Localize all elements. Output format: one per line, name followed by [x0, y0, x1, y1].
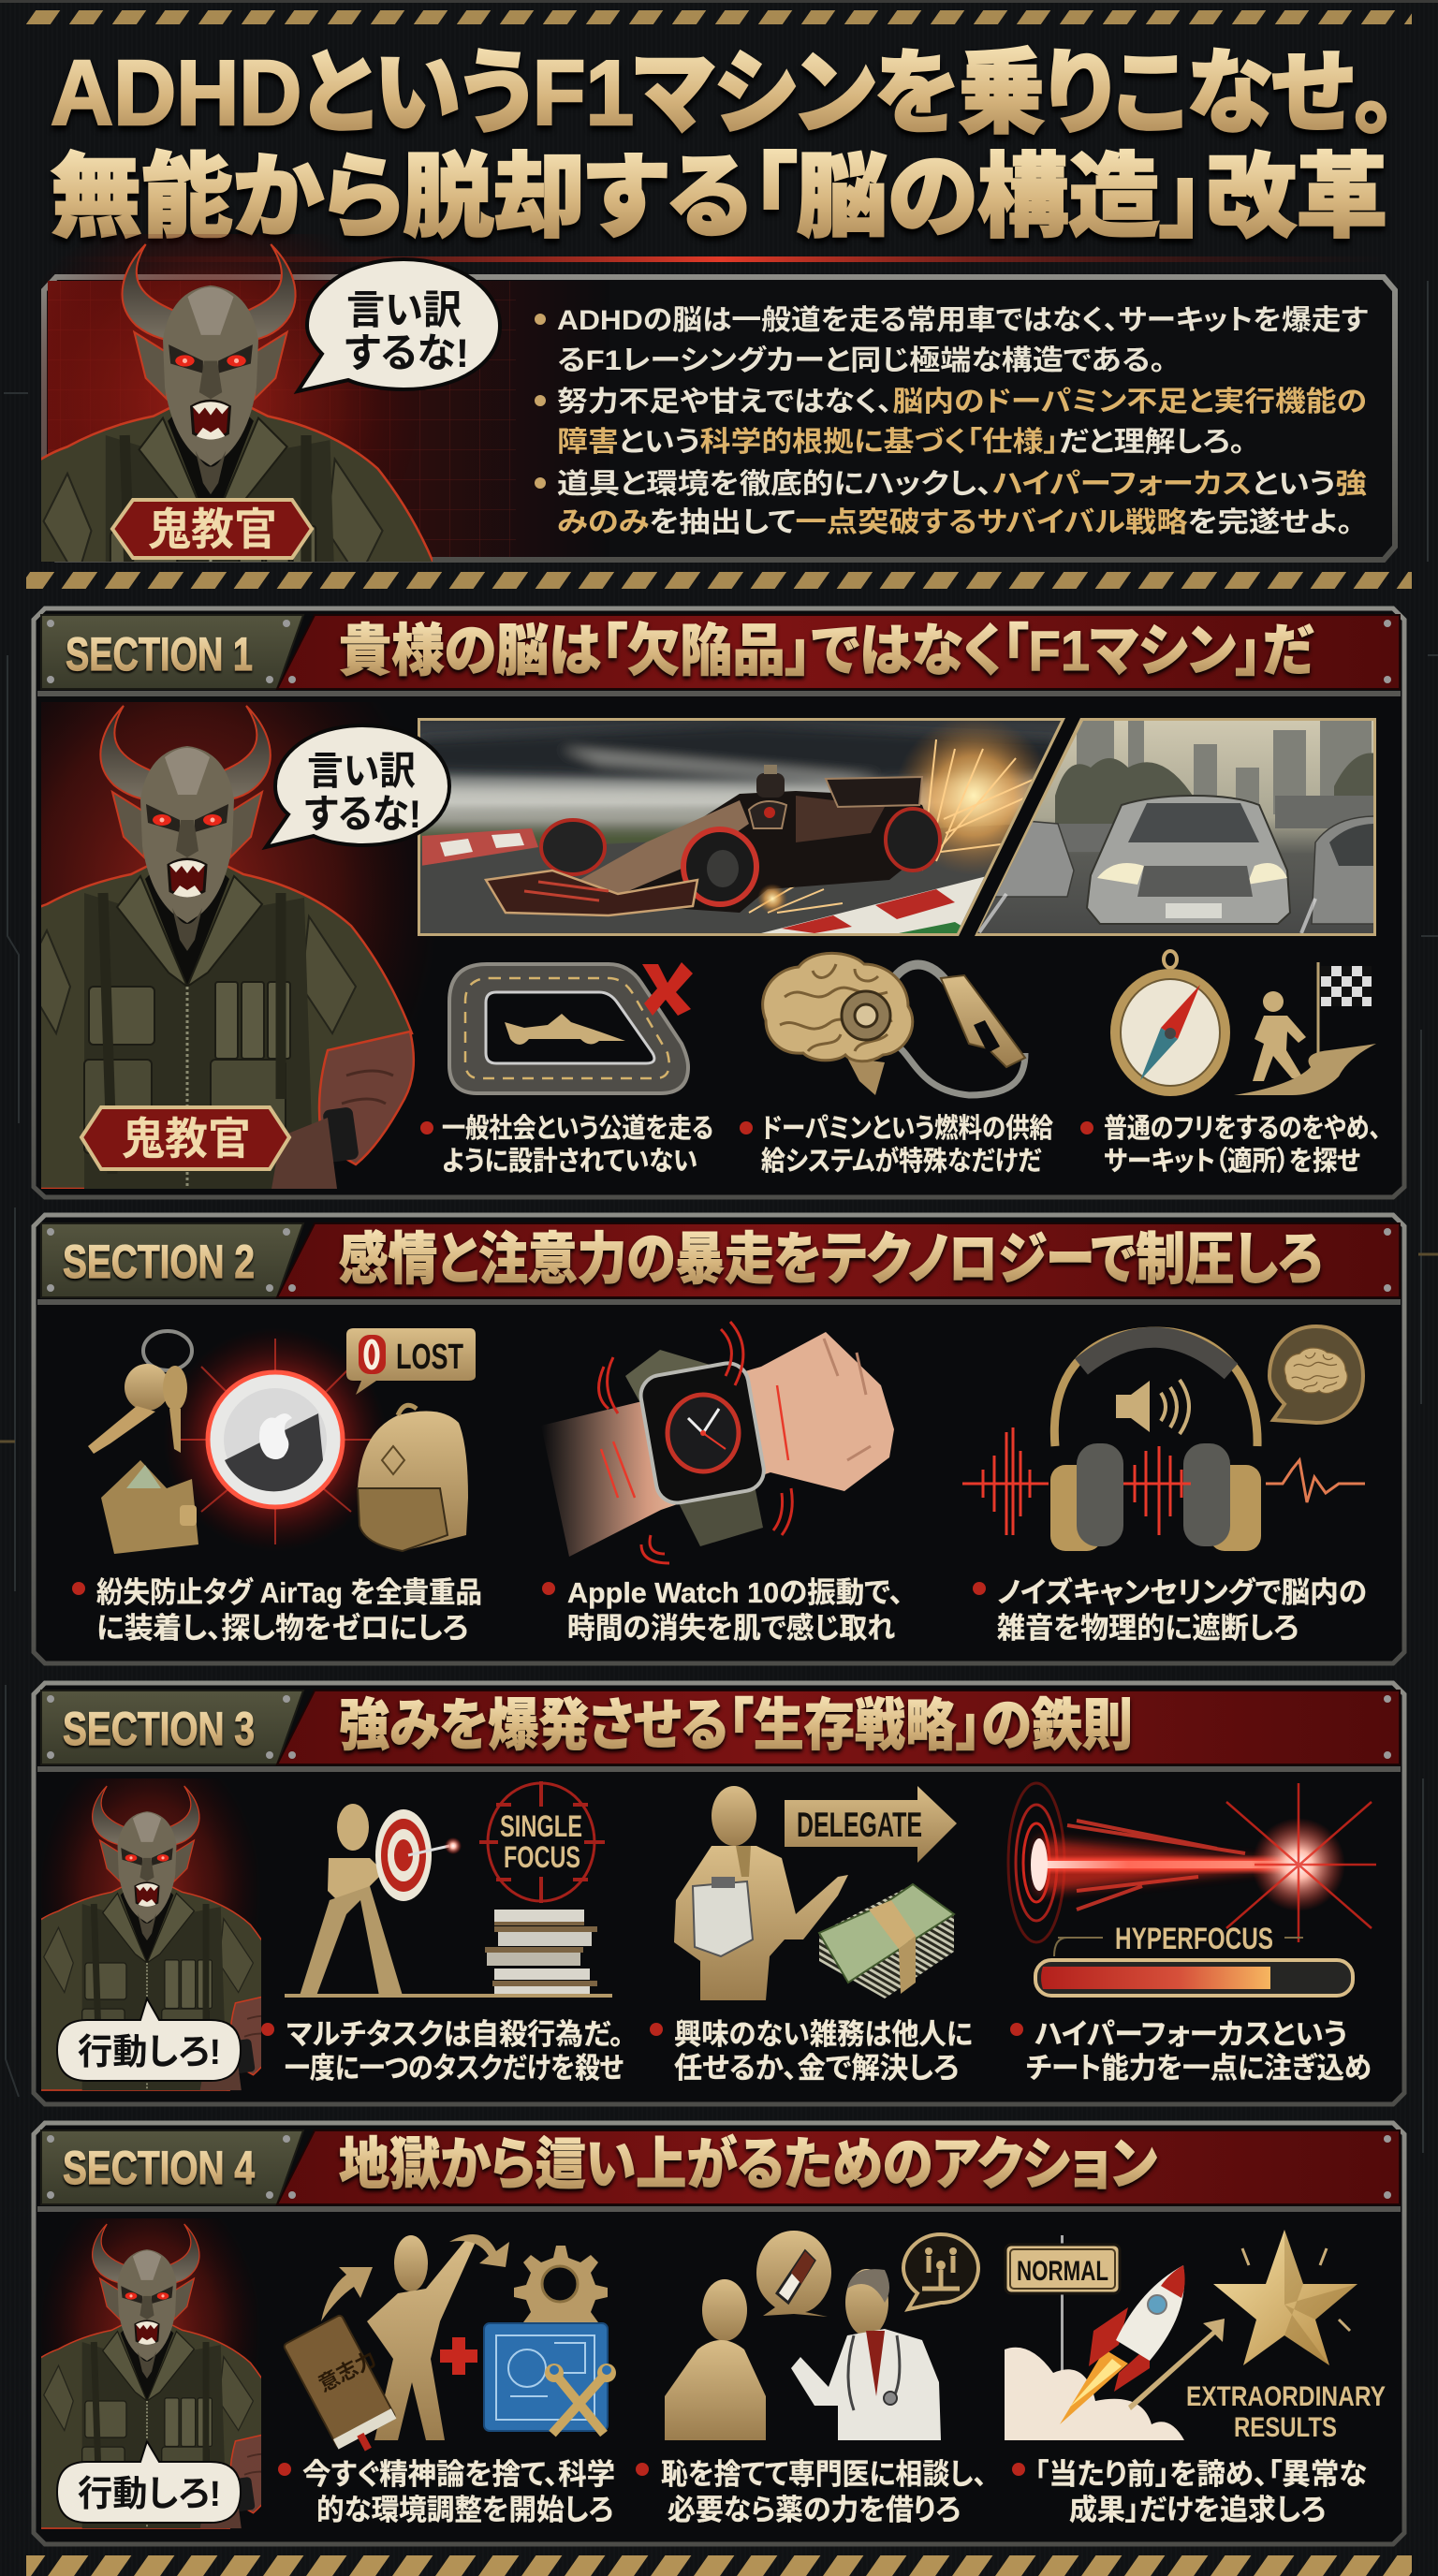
text block: three key points: 道具と環境を徹底的にハックし、 ハイパーフォーカス という 強	[557, 469, 1367, 500]
captions: section 2	[72, 1576, 1367, 1645]
section 2 heading: 感情と注意力の暴走をテクノロジーで制圧しろ	[339, 1228, 1322, 1291]
F1 car	[486, 765, 940, 915]
section 3 heading	[277, 1690, 1400, 1764]
section 2 tag: SECTION 2	[63, 1236, 255, 1288]
icon: person aiming at target with single focus: SINGLE	[500, 1809, 582, 1843]
badge: 鬼教官	[81, 1107, 289, 1169]
captions: section 4: 必要なら薬の力を借りろ	[668, 2494, 961, 2526]
hazard stripe: bottom	[26, 2555, 1412, 2576]
captions: section 3: ハイパーフォーカスという	[1034, 2018, 1347, 2051]
section 4 tag: SECTION 4	[63, 2142, 255, 2194]
character: demon instructor (section 4)	[41, 2218, 261, 2529]
captions: section 4: 成果」だけを追求しろ	[1069, 2494, 1326, 2526]
section 4 tag	[41, 2130, 303, 2204]
section 3 tag	[41, 1690, 303, 1764]
speech bubble: 言い訳するな	[266, 725, 449, 847]
captions: section 2: 時間の消失を肌で感じ取れ	[567, 1612, 895, 1645]
captions: section 3: 一度に一つのタスクだけを殺せ	[285, 2052, 624, 2085]
section 2 tag	[41, 1223, 303, 1297]
hazard stripe: top	[26, 10, 1412, 24]
icon: hyperfocus laser and gauge: HYPERFOCUS	[1115, 1922, 1273, 1955]
speech bubble: 言い訳するな: 言い訳	[346, 288, 462, 333]
icon: rocket past normal to star: EXTRAORDINARY	[1186, 2381, 1386, 2412]
speech bubble: 言い訳するな: 言い訳	[307, 749, 416, 793]
icon: from willpower to environment design	[283, 2234, 616, 2462]
panel: intro summary	[41, 234, 1398, 563]
speech bubble: 言い訳するな: するな!	[304, 792, 421, 836]
captions: section 2: Apple Watch 10の振動で、	[567, 1576, 903, 1609]
captions: section 4: 「当たり前」を諦め、「異常な	[1034, 2458, 1367, 2491]
red divider line	[54, 256, 1387, 262]
icon: Apple Watch vibrating on wrist	[541, 1322, 894, 1563]
section 1 tag	[41, 615, 303, 689]
captions: section 1	[420, 1113, 1381, 1177]
section 4 heading	[277, 2130, 1400, 2204]
icon: compass and walker with flag	[1110, 951, 1376, 1096]
text block: three key points: ADHDの脳は一般道を走る常用車ではなく、サーキットを爆走す	[557, 305, 1369, 336]
section 4 heading: 地獄から這い上がるためのアクション	[339, 2133, 1157, 2196]
section 3 tag: SECTION 3	[63, 1703, 255, 1755]
captions: section 1: 一般社会という公道を走る	[442, 1113, 713, 1144]
character: demon instructor (section 3)	[41, 1778, 261, 2091]
captions: section 4: 的な環境調整を開始しろ	[316, 2494, 613, 2526]
speech bubble: 行動しろ: 行動しろ!	[78, 2033, 221, 2072]
section 1 tag: SECTION 1	[66, 628, 253, 681]
text block: three key points: 障害という 科学的根拠に基づく「仕様」 だと理解しろ。	[557, 427, 1245, 458]
icon: lost tag bubble: LOST	[396, 1338, 463, 1377]
badge: 鬼教官: 鬼教官	[148, 505, 277, 554]
speech bubble: 言い訳するな	[298, 259, 500, 391]
text block: three key points: 努力不足や甘えではなく、 脳内のドーパミン不足と実行機能の	[557, 387, 1367, 417]
captions: section 2: 雑音を物理的に遮断しろ	[997, 1612, 1299, 1645]
captions: section 1: 普通のフリをするのをやめ、	[1104, 1113, 1381, 1144]
icon: consulting a doctor	[665, 2231, 978, 2440]
captions: section 3: マルチタスクは自殺行為だ。	[286, 2018, 624, 2051]
captions: section 1: 給システムが特殊なだけだ	[761, 1145, 1041, 1177]
image: saloon car in traffic	[974, 718, 1376, 936]
speech bubble: 言い訳するな: するな!	[345, 331, 469, 376]
icon: hyperfocus laser and gauge	[1008, 1783, 1376, 1996]
section 1 heading: 貴様の脳は「欠陥品」ではなく「F1マシン」だ	[339, 620, 1314, 682]
badge: 鬼教官	[112, 500, 312, 558]
captions: section 2: ノイズキャンセリングで脳内の	[997, 1576, 1367, 1609]
icon: delegate with money	[674, 1786, 957, 2000]
panel: section 1	[0, 590, 1404, 1208]
captions: section 2: 紛失防止タグ AirTag を全貴重品	[96, 1576, 482, 1609]
icon: race track crossed out	[449, 962, 693, 1093]
title: 無能から脱却する「脳の構造」改革	[51, 145, 1387, 248]
icon: from willpower to environment design: 意志力	[315, 2347, 380, 2396]
icon: lost tag bubble	[346, 1328, 476, 1395]
speech bubble: 行動しろ: 行動しろ!	[78, 2475, 221, 2514]
captions: section 4: 恥を捨てて専門医に相談し、	[661, 2458, 987, 2491]
speech bubble: 行動しろ	[57, 2441, 241, 2523]
captions: section 1: サーキット（適所）を探せ	[1104, 1146, 1360, 1177]
captions: section 3	[261, 2018, 1372, 2085]
icon: brain with fuel pump	[763, 953, 1025, 1095]
title	[51, 41, 1397, 248]
speech bubble: 行動しろ	[57, 1998, 241, 2081]
icon: rocket past normal to star: RESULTS	[1234, 2412, 1337, 2443]
icon: rocket past normal to star: NORMAL	[1017, 2256, 1108, 2287]
captions: section 4	[278, 2458, 1367, 2526]
text block: three key points: みのみ を抽出して 一点突破するサバイバル戦略 を完遂せよ。	[557, 507, 1353, 538]
icon: AirTag with keys, wallet, backpack	[88, 1327, 468, 1554]
character: demon instructor (intro)	[41, 234, 433, 562]
text block: three key points	[535, 305, 1369, 538]
captions: section 4: 今すぐ精神論を捨て、科学	[302, 2458, 615, 2491]
panel: section 2	[34, 1215, 1404, 1663]
icon: noise cancelling headphones	[962, 1326, 1365, 1551]
captions: section 1: ドーパミンという燃料の供給	[761, 1113, 1053, 1144]
text block: three key points: るF1レーシングカーと同じ極端な構造である。	[557, 345, 1166, 376]
hazard stripe: under intro	[26, 572, 1412, 589]
panel: section 4	[11, 2123, 1404, 2544]
icon: rocket past normal to star	[1005, 2230, 1386, 2443]
image: F1 car on circuit	[418, 716, 1066, 936]
captions: section 1: ように設計されていない	[442, 1146, 697, 1177]
captions: section 3: チート能力を一点に注ぎ込め	[1026, 2052, 1372, 2085]
character: demon instructor (section 1)	[41, 702, 416, 1189]
panel: section 3	[11, 1683, 1404, 2104]
icon: delegate with money: DELEGATE	[797, 1806, 922, 1844]
icon: person aiming at target with single focus	[285, 1781, 612, 1998]
captions: section 3: 興味のない雑務は他人に	[674, 2018, 973, 2051]
captions: section 2: に装着し、探し物をゼロにしろ	[96, 1612, 468, 1645]
captions: section 3: 任せるか、金で解決しろ	[674, 2052, 959, 2085]
icon: person aiming at target with single focus: FOCUS	[504, 1840, 580, 1874]
title: ADHDというF1マシンを乗りこなせ。	[51, 41, 1397, 144]
section 3 heading: 強みを爆発させる「生存戦略」の鉄則	[339, 1694, 1133, 1757]
badge: 鬼教官: 鬼教官	[122, 1114, 251, 1164]
